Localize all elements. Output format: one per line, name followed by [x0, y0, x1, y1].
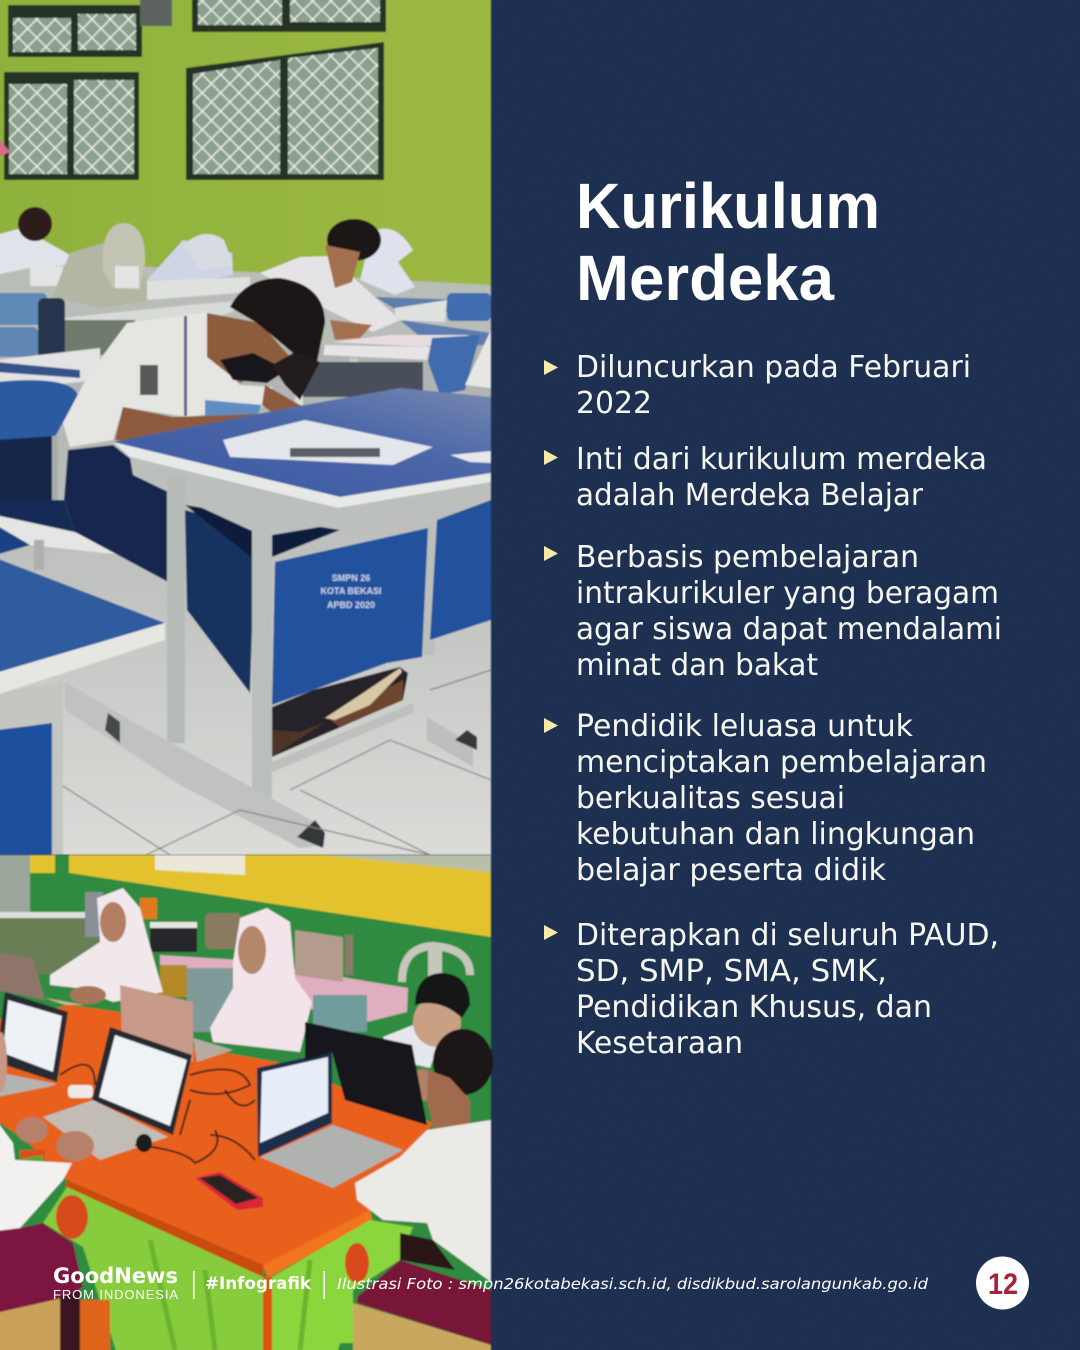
bullet 4: belajar peserta didik	[576, 853, 887, 888]
front left chair	[0, 380, 170, 602]
photo: students using laptops at orange table	[0, 855, 493, 1350]
floor beams and feet	[65, 682, 325, 848]
back row chairs	[0, 293, 47, 325]
panel: navy text background	[491, 0, 1080, 1350]
icon: triangle bullet	[544, 450, 558, 465]
icon: triangle bullet	[544, 546, 558, 561]
background furniture	[0, 892, 470, 1032]
cables	[60, 1065, 255, 1163]
logo: GoodNews from Indonesia: GoodNews	[53, 1264, 178, 1288]
hashtag: Infografik: #Infografik	[205, 1274, 312, 1293]
bullet 3: intrakurikuler yang beragam	[576, 576, 999, 611]
windows	[0, 0, 386, 180]
bullet 4: berkualitas sesuai	[576, 781, 845, 816]
bullet 3: minat dan bakat	[576, 648, 818, 683]
icon: triangle bullet	[544, 718, 558, 733]
photo: students writing at classroom desks	[0, 0, 491, 855]
boy behind	[383, 973, 470, 1101]
main desk	[63, 388, 491, 855]
shoes	[272, 667, 408, 757]
icon: triangle bullet	[544, 360, 558, 375]
left foreground desk	[0, 558, 165, 855]
bullet 1	[544, 350, 971, 421]
laptops	[0, 952, 427, 1188]
maroon seats and wooden benches	[0, 1223, 491, 1350]
student in white hijab centre	[210, 908, 312, 1052]
bullet 4	[544, 709, 987, 888]
page number badge: 12	[988, 1268, 1018, 1301]
title: Merdeka	[576, 242, 834, 314]
title: Kurikulum	[576, 170, 880, 242]
main desk: SMPN 26	[332, 573, 370, 583]
bullet 5: SD, SMP, SMA, SMK,	[576, 954, 887, 989]
bullet 3: agar siswa dapat mendalami	[576, 612, 1002, 647]
student in white hijab left	[50, 888, 163, 1004]
green table skirt	[15, 1155, 413, 1350]
icon: triangle bullet	[544, 925, 558, 940]
title	[576, 170, 880, 314]
bullet 2: adalah Merdeka Belajar	[576, 478, 924, 513]
main desk: APBD 2020	[327, 600, 375, 610]
back row students and desks	[0, 207, 491, 408]
bullet 3: Berbasis pembelajaran	[576, 540, 919, 575]
bullet 3	[544, 540, 1002, 683]
bullet 5	[544, 918, 999, 1061]
logo: GoodNews from Indonesia	[53, 1264, 178, 1302]
bullet 1: 2022	[576, 386, 652, 421]
bullet 2: Inti dari kurikulum merdeka	[576, 442, 987, 477]
photo credit: Ilustrasi Foto : smpn26kotabekasi.sch.id, disdikbud.sarolangunkab.go.id	[337, 1275, 929, 1293]
bullet 5: Diterapkan di seluruh PAUD,	[576, 918, 999, 953]
main student	[0, 278, 340, 693]
page number badge	[976, 1256, 1029, 1310]
floor tile lines	[63, 670, 491, 855]
bullet 4: menciptakan pembelajaran	[576, 745, 987, 780]
bullet 4: kebutuhan dan lingkungan	[576, 817, 975, 852]
bullet 5: Kesetaraan	[576, 1026, 743, 1061]
bullet 1: Diluncurkan pada Februari	[576, 350, 971, 385]
bullet 5: Pendidikan Khusus, dan	[576, 990, 932, 1025]
logo: GoodNews from Indonesia: FROM INDONESIA	[53, 1287, 178, 1302]
bullet 2	[544, 442, 987, 513]
student arm left	[0, 1032, 94, 1231]
main desk: KOTA BEKASI	[320, 586, 382, 596]
bullet 4: Pendidik leluasa untuk	[576, 709, 914, 744]
phone	[195, 1172, 263, 1210]
boy in front right	[355, 1029, 493, 1282]
desk frame	[130, 457, 491, 535]
orange table	[0, 1005, 433, 1278]
